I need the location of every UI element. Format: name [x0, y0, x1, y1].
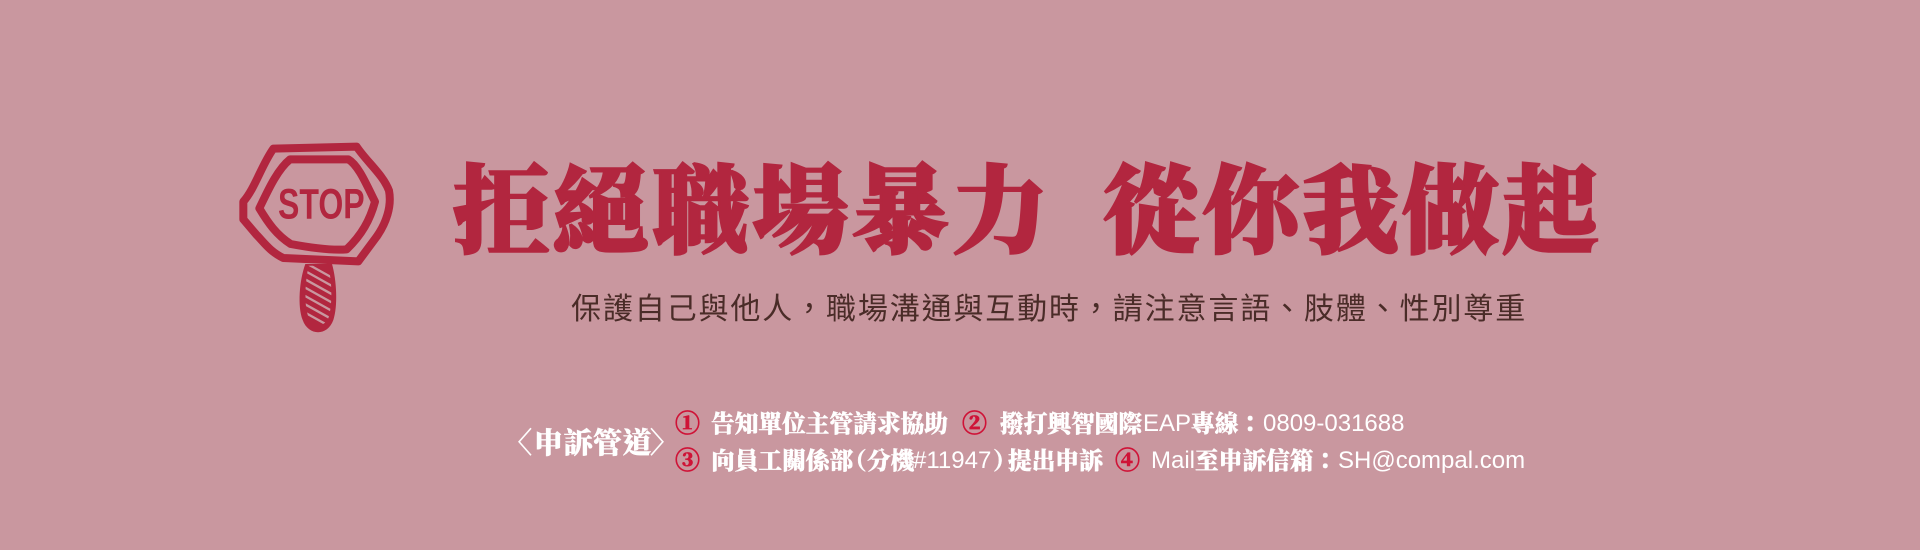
- icon: stop sign: [239, 142, 394, 332]
- heading: complaint channels: [503, 421, 680, 462]
- channel 4: [1115, 441, 1525, 477]
- channel 3: ③: [675, 441, 700, 477]
- channel 3: 向員工關係部: [711, 442, 853, 476]
- channel 3: 分機: [867, 442, 914, 476]
- channel 2: 0809-031688: [1263, 410, 1404, 437]
- channel 3: 提出申訴: [1008, 442, 1103, 476]
- channel 1: 告知單位主管請求協助: [711, 405, 948, 439]
- channel 4: ④: [1115, 441, 1140, 477]
- heading: complaint channels: 申訴管道: [534, 421, 652, 462]
- subtitle: 保護自己與他人，職場溝通與互動時，請注意言語、肢體、性別尊重: [571, 284, 1527, 328]
- channel 2: 撥打興智國際: [1000, 405, 1142, 439]
- icon: stop sign: STOP: [278, 180, 365, 228]
- heading: complaint channels: 〉: [650, 421, 680, 462]
- channel 1: ①: [675, 404, 700, 440]
- heading: complaint channels: 〈: [503, 421, 533, 462]
- channel 4: SH@compal.com: [1338, 447, 1525, 474]
- channel 2: [962, 404, 1404, 440]
- channel 2: ②: [962, 404, 987, 440]
- channel 3: [675, 441, 1103, 477]
- channel 3: （: [843, 442, 867, 476]
- channel 2: EAP: [1143, 410, 1191, 437]
- text: 從你我做起: [1103, 136, 1602, 273]
- channel 4: Mail: [1151, 447, 1195, 474]
- channel 3: ）: [993, 442, 1017, 476]
- channel 3: #11947: [913, 447, 991, 474]
- title: [452, 136, 1602, 273]
- title: 拒絕職場暴力: [453, 136, 1052, 273]
- channel 2: 專線：: [1191, 405, 1262, 439]
- channel 4: 至申訴信箱：: [1195, 442, 1337, 476]
